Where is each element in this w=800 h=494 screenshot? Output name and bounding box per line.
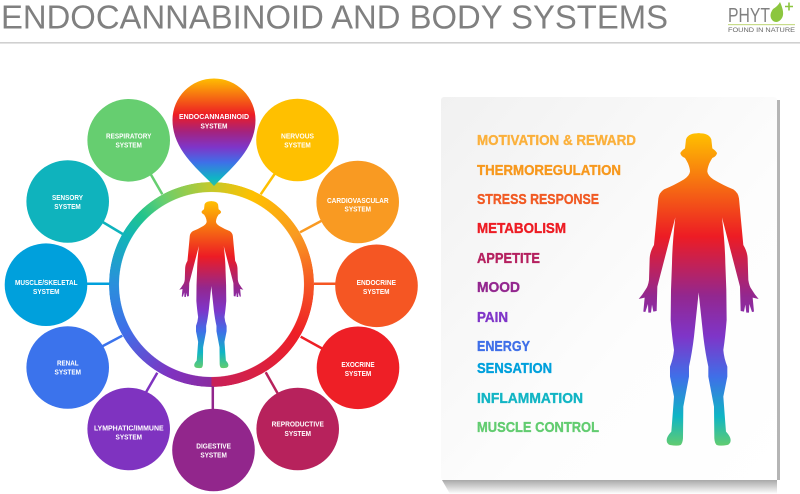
circle: renal system <box>26 326 109 409</box>
circle: endocrine system <box>335 244 418 327</box>
circle: digestive system: DIGESTIVE <box>196 444 231 451</box>
circle: lymphatic/immune system: SYSTEM <box>116 434 142 441</box>
circle: cardiovascular system: CARDIOVASCULAR <box>327 198 389 205</box>
function labels: INFLAMMATION <box>477 391 583 407</box>
circle: nervous system: SYSTEM <box>284 142 311 149</box>
circle: muscle/skeletal system: MUSCLE/SKELETAL <box>15 280 78 287</box>
circle: respiratory system <box>87 99 170 182</box>
circle: endocrine system: SYSTEM <box>363 289 390 296</box>
circle: endocrine system: ENDOCRINE <box>357 280 396 287</box>
circle: lymphatic/immune system: LYMPHATIC/IMMUNE <box>94 425 164 432</box>
function labels: MUSCLE CONTROL <box>477 420 599 436</box>
circle: digestive system <box>172 409 255 491</box>
large body figure <box>639 133 759 446</box>
circle: exocrine system: EXOCRINE <box>341 362 375 369</box>
circle: nervous system <box>256 99 339 181</box>
circle: exocrine system <box>317 326 399 409</box>
pin: endocannabinoid system: ENDOCANNABINOID <box>179 114 249 121</box>
connector lines <box>85 172 338 411</box>
function labels: STRESS RESPONSE <box>477 192 599 208</box>
function labels: MOTIVATION & REWARD <box>477 133 636 149</box>
circle: respiratory system: RESPIRATORY <box>106 134 152 141</box>
logo: PHYT <box>728 4 770 27</box>
pin: endocannabinoid system: SYSTEM <box>200 123 228 130</box>
circle: sensory system: SYSTEM <box>54 204 81 211</box>
circle: reproductive system <box>256 388 339 470</box>
small body figure <box>179 201 243 368</box>
function labels: THERMOREGULATION <box>477 163 621 179</box>
circle: muscle/skeletal system: SYSTEM <box>33 289 60 296</box>
circle: reproductive system: SYSTEM <box>285 431 311 438</box>
circle: reproductive system: REPRODUCTIVE <box>272 422 324 429</box>
ring <box>109 182 314 387</box>
function labels: PAIN <box>477 310 508 326</box>
circle: renal system: RENAL <box>57 361 79 368</box>
circle: respiratory system: SYSTEM <box>115 142 142 150</box>
function labels: METABOLISM <box>477 221 566 237</box>
circle: nervous system: NERVOUS <box>281 133 314 140</box>
logo <box>728 2 795 34</box>
circle: exocrine system: SYSTEM <box>345 371 371 378</box>
circle: sensory system <box>26 160 109 243</box>
circle: cardiovascular system: SYSTEM <box>345 207 371 214</box>
circle: lymphatic/immune system <box>87 388 170 470</box>
function labels <box>477 133 636 436</box>
circle: muscle/skeletal system <box>5 243 87 326</box>
function labels: MOOD <box>477 280 520 296</box>
pin: endocannabinoid system <box>172 78 256 186</box>
circle: renal system: SYSTEM <box>55 370 81 377</box>
circle: cardiovascular system <box>316 161 399 243</box>
function labels: ENERGY <box>477 339 530 355</box>
function labels: SENSATION <box>477 361 552 377</box>
circle: sensory system: SENSORY <box>52 195 83 202</box>
panel: body functions <box>441 97 780 494</box>
function labels: APPETITE <box>477 251 540 267</box>
logo: FOUND IN NATURE <box>728 28 795 34</box>
circle: digestive system: SYSTEM <box>200 452 227 460</box>
